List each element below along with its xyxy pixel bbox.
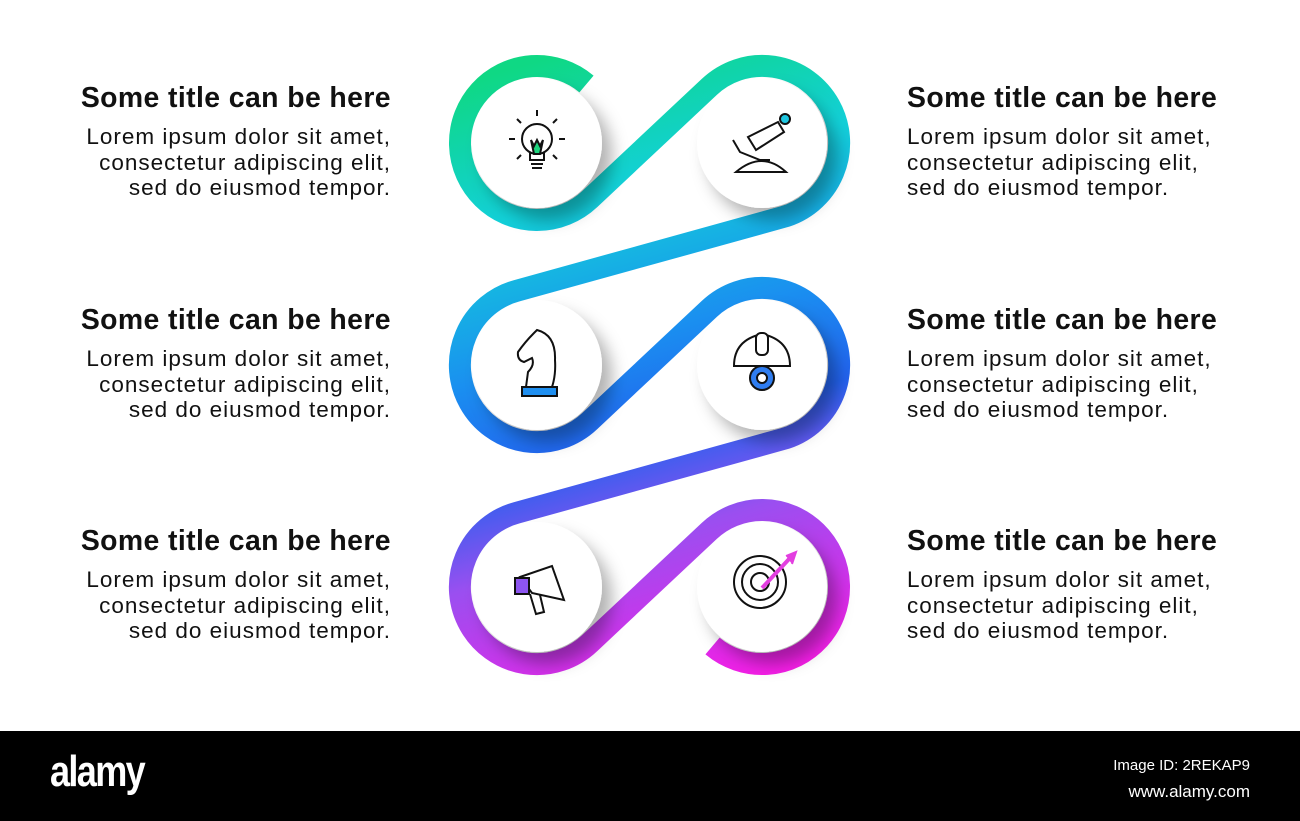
- text block 2: [907, 82, 1217, 200]
- text block 2: sed do eiusmod tempor.: [907, 175, 1169, 200]
- text block 2: Some title can be here: [907, 82, 1217, 114]
- text block 3: sed do eiusmod tempor.: [129, 397, 391, 422]
- text block 1: consectetur adipiscing elit,: [99, 150, 391, 174]
- circle 6: target: [697, 522, 827, 652]
- footer logo: alamy: [50, 747, 144, 796]
- text block 1: Lorem ipsum dolor sit amet,: [86, 124, 391, 149]
- text block 4: Lorem ipsum dolor sit amet,: [907, 346, 1212, 371]
- text block 6: sed do eiusmod tempor.: [907, 618, 1169, 643]
- text block 6: consectetur adipiscing elit,: [907, 592, 1199, 618]
- text block 6: Some title can be here: [907, 525, 1217, 557]
- text block 4: [907, 304, 1217, 422]
- text block 4: sed do eiusmod tempor.: [907, 397, 1169, 422]
- text block 1: [81, 82, 391, 200]
- circle 2: research: [697, 78, 827, 208]
- text block 6: Lorem ipsum dolor sit amet,: [907, 567, 1212, 592]
- text block 6: [907, 525, 1217, 643]
- text block 5: Some title can be here: [81, 525, 391, 557]
- icon: megaphone: [515, 566, 564, 614]
- icon: target with arrow: [734, 552, 796, 608]
- text block 3: consectetur adipiscing elit,: [99, 372, 391, 396]
- circle 5: marketing: [472, 522, 602, 652]
- text block 5: sed do eiusmod tempor.: [129, 618, 391, 643]
- text block 5: [81, 525, 391, 643]
- text block 3: Some title can be here: [81, 304, 391, 336]
- text block 5: consectetur adipiscing elit,: [99, 592, 391, 618]
- text block 4: Some title can be here: [907, 304, 1217, 336]
- footer image id: www.alamy.com: [1128, 782, 1250, 801]
- text block 5: Lorem ipsum dolor sit amet,: [86, 567, 391, 592]
- footer image id: [1113, 757, 1250, 801]
- text block 3: [81, 304, 391, 422]
- icon: light bulb: [509, 110, 565, 168]
- circle 3: strategy: [472, 300, 602, 430]
- icon: microscope: [733, 114, 790, 172]
- circle 1: idea: [472, 78, 602, 208]
- ribbon path: [460, 66, 839, 664]
- text block 2: Lorem ipsum dolor sit amet,: [907, 124, 1212, 149]
- footer image id: Image ID: 2REKAP9: [1113, 757, 1250, 774]
- text block 1: Some title can be here: [81, 82, 391, 114]
- icon: chess knight: [518, 330, 557, 396]
- icon: hard hat with gear: [734, 333, 790, 390]
- text block 4: consectetur adipiscing elit,: [907, 372, 1199, 396]
- text block 1: sed do eiusmod tempor.: [129, 175, 391, 200]
- text block 2: consectetur adipiscing elit,: [907, 150, 1199, 174]
- circle 4: engineering: [697, 300, 827, 430]
- footer bar: [0, 731, 1300, 821]
- text block 3: Lorem ipsum dolor sit amet,: [86, 346, 391, 371]
